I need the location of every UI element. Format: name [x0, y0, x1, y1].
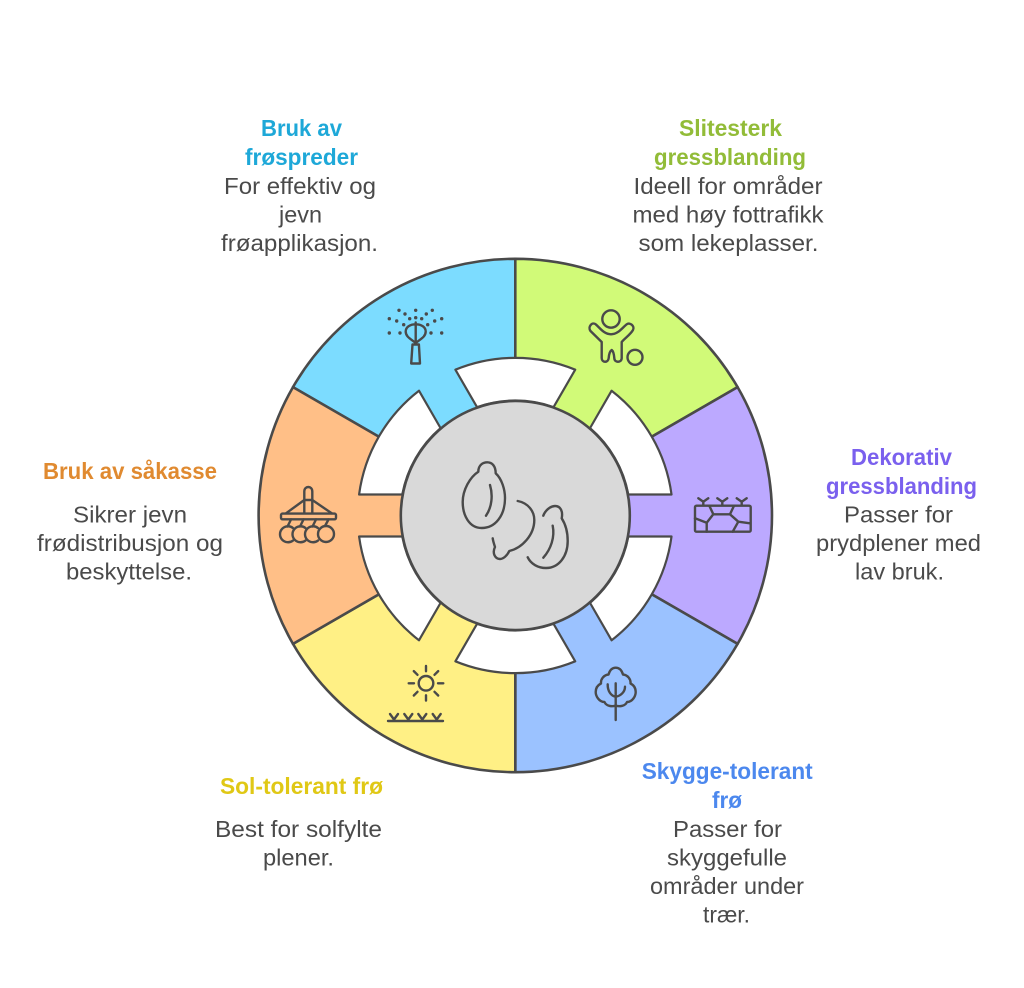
description: Sikrer jevn	[73, 502, 187, 528]
description: frødistribusjon og	[37, 530, 223, 556]
heading	[245, 115, 358, 170]
description	[816, 502, 981, 584]
heading: Dekorativ	[851, 444, 952, 470]
description: lav bruk.	[855, 558, 944, 584]
description	[37, 502, 223, 584]
heading	[654, 115, 806, 170]
description: områder under	[650, 873, 804, 899]
description: Best for solfylte	[215, 816, 382, 842]
description: Passer for	[673, 816, 782, 842]
heading: gressblanding	[654, 144, 806, 170]
text block: Slitesterk gressblanding	[632, 115, 824, 256]
description: Passer for	[844, 502, 953, 528]
icon: cracked ground with sprouts	[695, 498, 751, 532]
text block: Skygge-tolerant frø	[642, 758, 813, 928]
heading: gressblanding	[826, 473, 977, 499]
panel: segment purple	[515, 387, 772, 644]
description: som lekeplasser.	[638, 230, 818, 256]
heading: Skygge-tolerant	[642, 758, 813, 784]
white ring notches	[349, 358, 682, 673]
description: skyggefulle	[667, 844, 787, 870]
heading: frøspreder	[245, 144, 358, 170]
description	[650, 816, 804, 928]
panel: segment green	[515, 259, 738, 516]
description: prydplener med	[816, 530, 981, 556]
description	[221, 173, 378, 256]
description: med høy fottrafikk	[632, 202, 824, 228]
description	[215, 816, 382, 870]
description: jevn	[278, 202, 322, 228]
text block: Bruk av frøspreder	[221, 115, 378, 256]
heading: Sol-tolerant frø	[220, 773, 384, 799]
heading: frø	[712, 787, 743, 813]
icon: child with ball	[590, 310, 642, 365]
icon: seed drill	[280, 487, 336, 542]
heading	[642, 758, 813, 813]
description: frøapplikasjon.	[221, 230, 378, 256]
heading: Bruk av	[261, 115, 342, 141]
heading	[826, 444, 977, 499]
description: Ideell for områder	[634, 173, 823, 199]
icon: sprinkler	[388, 309, 443, 364]
description: trær.	[703, 902, 750, 928]
center circle	[401, 401, 630, 630]
heading: Bruk av såkasse	[43, 458, 217, 484]
panel: segment yellow	[293, 516, 515, 772]
icon: tree	[596, 668, 636, 720]
description: beskyttelse.	[66, 558, 192, 584]
text block: Sol-tolerant frø	[215, 773, 384, 870]
icon: seeds	[463, 462, 568, 568]
panel: segment orange	[259, 387, 515, 644]
panel: segment light blue	[515, 516, 738, 772]
description: For effektiv og	[224, 173, 376, 199]
heading: Slitesterk	[679, 115, 783, 141]
text block: Bruk av såkasse	[37, 458, 223, 584]
circular diagram	[259, 259, 772, 772]
description	[632, 173, 824, 256]
icon: sun and grass	[388, 666, 443, 721]
text block: Dekorativ gressblanding	[816, 444, 981, 584]
description: plener.	[263, 844, 334, 870]
panel: segment blue	[293, 259, 515, 516]
